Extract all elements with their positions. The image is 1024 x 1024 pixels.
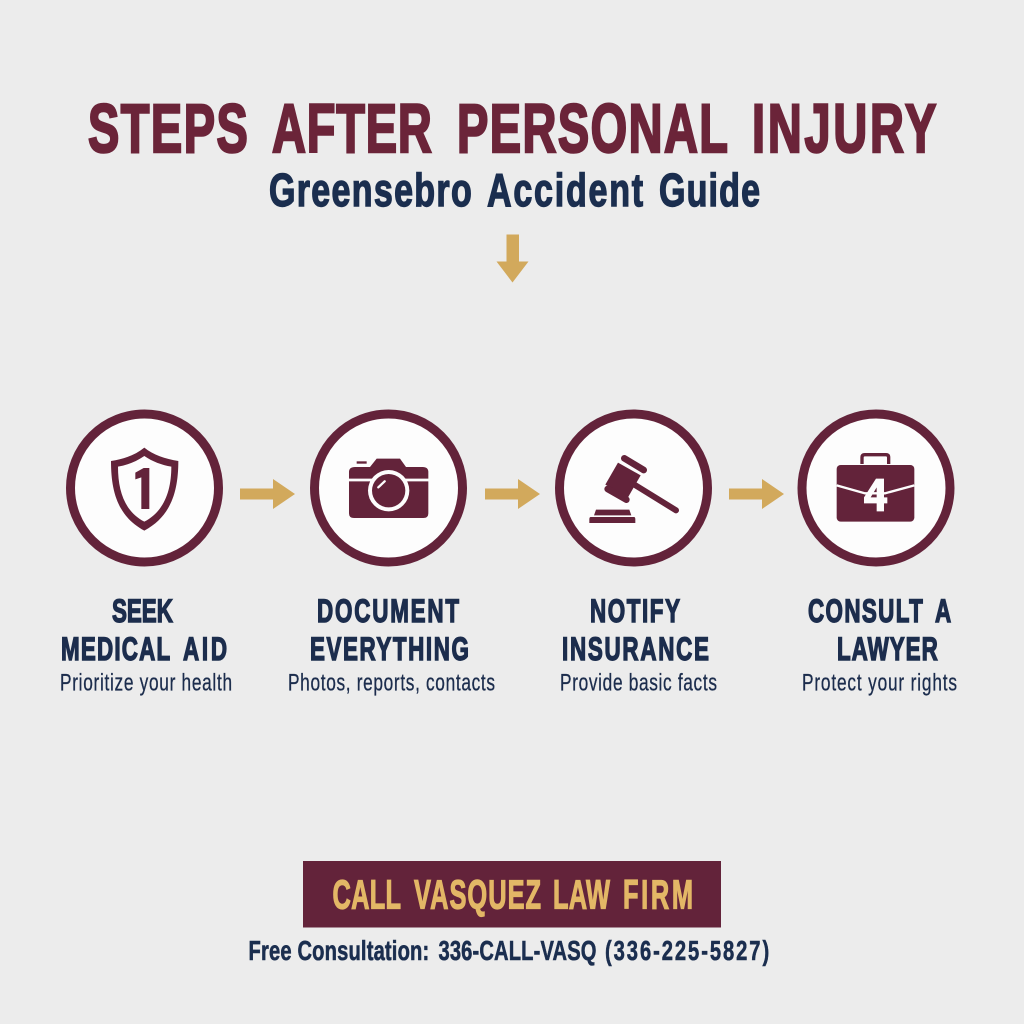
icon: shield with 1 <box>70 414 218 562</box>
step 2 description: Photos, reports, contacts <box>288 670 495 696</box>
icon: briefcase with 4 <box>802 414 950 562</box>
icon: camera <box>314 414 462 562</box>
icon: gavel <box>560 414 708 562</box>
step 4 heading: CONSULT <box>808 593 923 629</box>
arrow: down <box>496 234 528 282</box>
subtitle: Accident <box>487 164 643 216</box>
step 1 description: Prioritize your health <box>60 670 232 696</box>
step 4 heading: LAWYER <box>837 631 938 667</box>
step 2 heading: DOCUMENT <box>317 593 459 629</box>
step 2 heading: EVERYTHING <box>310 631 469 667</box>
contact line: 336-CALL-VASQ <box>438 936 596 967</box>
contact line <box>248 936 769 967</box>
arrow: step 3 to 4 <box>729 479 784 509</box>
title: AFTER <box>272 90 432 167</box>
step 3 heading: NOTIFY <box>590 593 680 629</box>
call to action banner: CALL <box>332 872 401 918</box>
call to action banner: FIRM <box>623 872 693 918</box>
call to action banner <box>303 861 721 928</box>
contact line: (336-225-5827) <box>605 936 769 967</box>
title <box>88 90 936 167</box>
subtitle: Greensebro <box>269 164 472 216</box>
subtitle <box>269 164 760 216</box>
call to action banner: LAW <box>553 872 611 918</box>
step 4 heading: A <box>935 593 951 629</box>
title: STEPS <box>88 90 248 167</box>
step 1 heading: MEDICAL <box>61 631 170 667</box>
step 1: seek medical aid <box>60 414 232 696</box>
call to action banner: VASQUEZ <box>414 872 541 918</box>
step 4: consult a lawyer <box>802 414 957 696</box>
contact line: Free Consultation: <box>248 936 429 967</box>
step 3: notify insurance <box>560 414 717 696</box>
step 4 description: Protect your rights <box>802 670 957 696</box>
step 1 heading: SEEK <box>112 593 173 629</box>
arrow: step 2 to 3 <box>485 479 540 509</box>
step 3 heading: INSURANCE <box>562 631 709 667</box>
step 4 heading <box>808 593 951 667</box>
subtitle: Guide <box>659 164 760 216</box>
title: INJURY <box>752 90 936 167</box>
step 1 heading: AID <box>183 631 227 667</box>
step 2 heading <box>310 593 469 667</box>
arrow: step 1 to 2 <box>240 479 295 509</box>
step 2: document everything <box>288 414 495 696</box>
step 3 description: Provide basic facts <box>560 670 717 696</box>
step 1 heading <box>61 593 227 667</box>
title: PERSONAL <box>457 90 728 167</box>
step 3 heading <box>562 593 709 667</box>
